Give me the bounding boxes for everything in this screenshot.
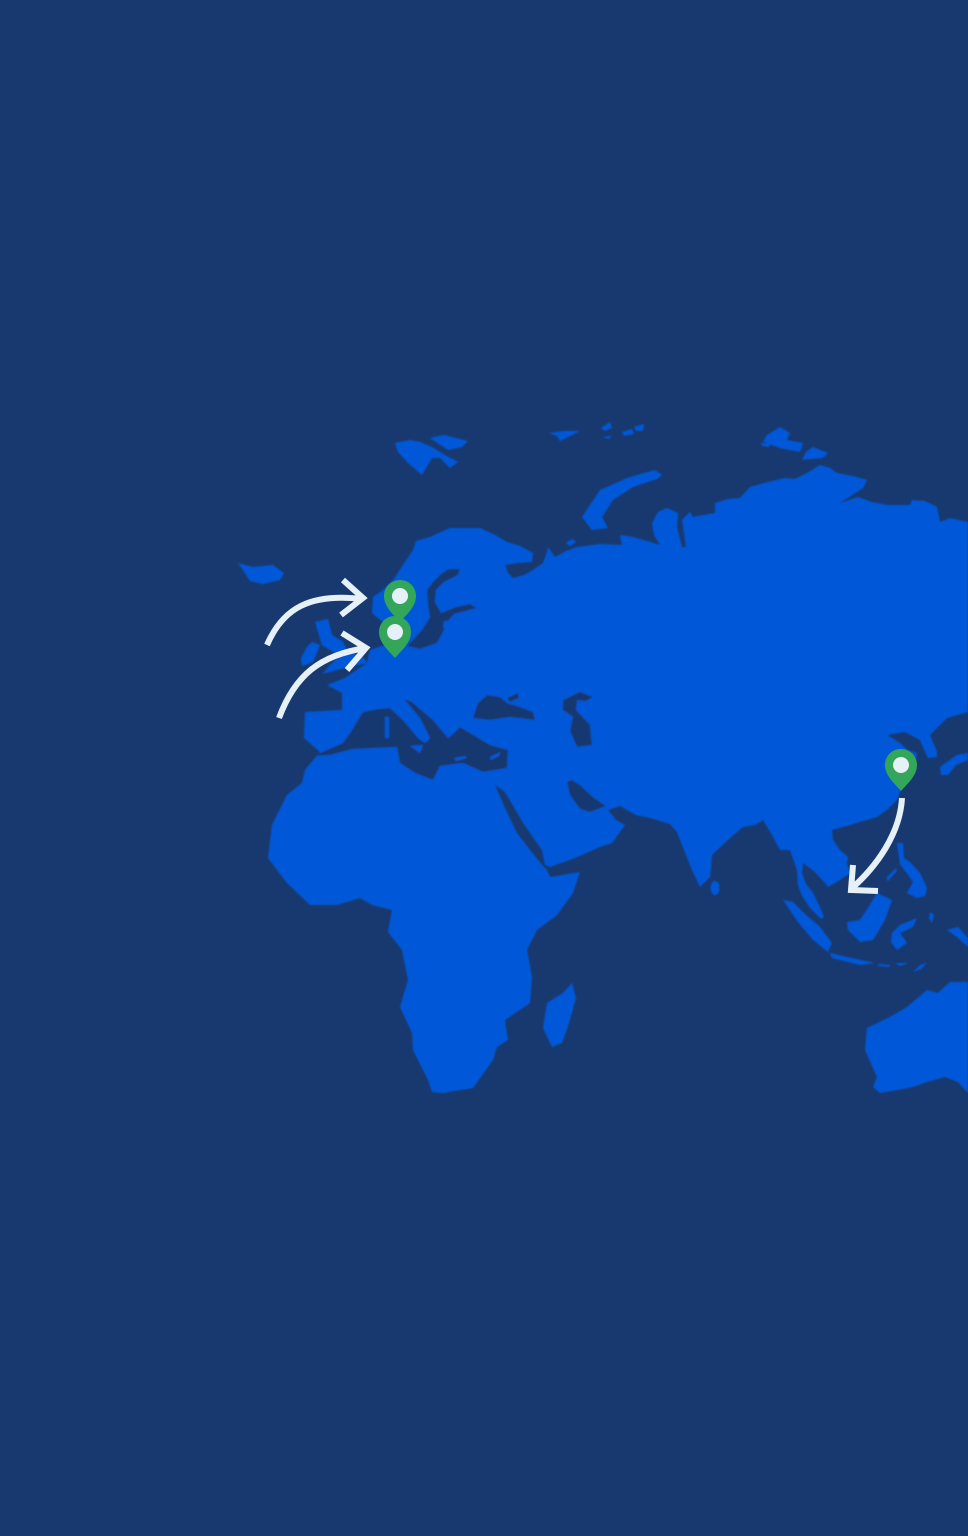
land: Sri Lanka bbox=[710, 881, 720, 895]
arrow: route from East Asia to Southeast Asia bbox=[851, 798, 902, 891]
arrow: route into northern Europe bbox=[267, 580, 363, 645]
world map bbox=[238, 422, 968, 1093]
pin: East Asia bbox=[885, 749, 917, 791]
land: White Sea islands bbox=[566, 539, 576, 546]
land: Iceland bbox=[238, 563, 284, 584]
land: Australia bbox=[865, 982, 968, 1093]
pin: western Europe bbox=[379, 616, 411, 658]
land: Franz Josef Land bbox=[549, 422, 644, 441]
land: Novaya Zemlya bbox=[582, 470, 662, 530]
arrow: route into western Europe bbox=[279, 633, 366, 718]
land: Ireland bbox=[301, 642, 320, 666]
land: Philippines bbox=[897, 843, 927, 898]
sea: Mediterranean bbox=[312, 699, 508, 780]
land: Madagascar bbox=[543, 983, 576, 1047]
land: Japan bbox=[940, 753, 968, 775]
sea: Baltic bbox=[407, 569, 477, 649]
land: Borneo bbox=[847, 893, 892, 942]
island: Crete and Cyprus bbox=[454, 752, 500, 761]
land: Svalbard bbox=[395, 435, 468, 475]
land: Java and Lesser Sunda bbox=[830, 953, 927, 972]
sea: Black Sea bbox=[473, 693, 535, 720]
island: Gotland and Estonian isles bbox=[443, 621, 449, 630]
land: New Guinea bbox=[929, 912, 968, 947]
land: Great Britain bbox=[315, 619, 367, 674]
island: Corsica and Sardinia bbox=[385, 717, 389, 738]
sea: Caspian bbox=[563, 692, 593, 747]
land: Palawan bbox=[886, 868, 897, 881]
island: Sicily bbox=[410, 745, 423, 753]
land: Sumatra bbox=[783, 900, 832, 952]
land: Severnaya Zemlya bbox=[761, 427, 828, 460]
landmass: Eurasia and Africa bbox=[268, 465, 968, 1093]
land: Sulawesi bbox=[891, 918, 917, 950]
pin: northern Europe bbox=[384, 580, 416, 622]
sea: Persian Gulf bbox=[567, 780, 606, 812]
